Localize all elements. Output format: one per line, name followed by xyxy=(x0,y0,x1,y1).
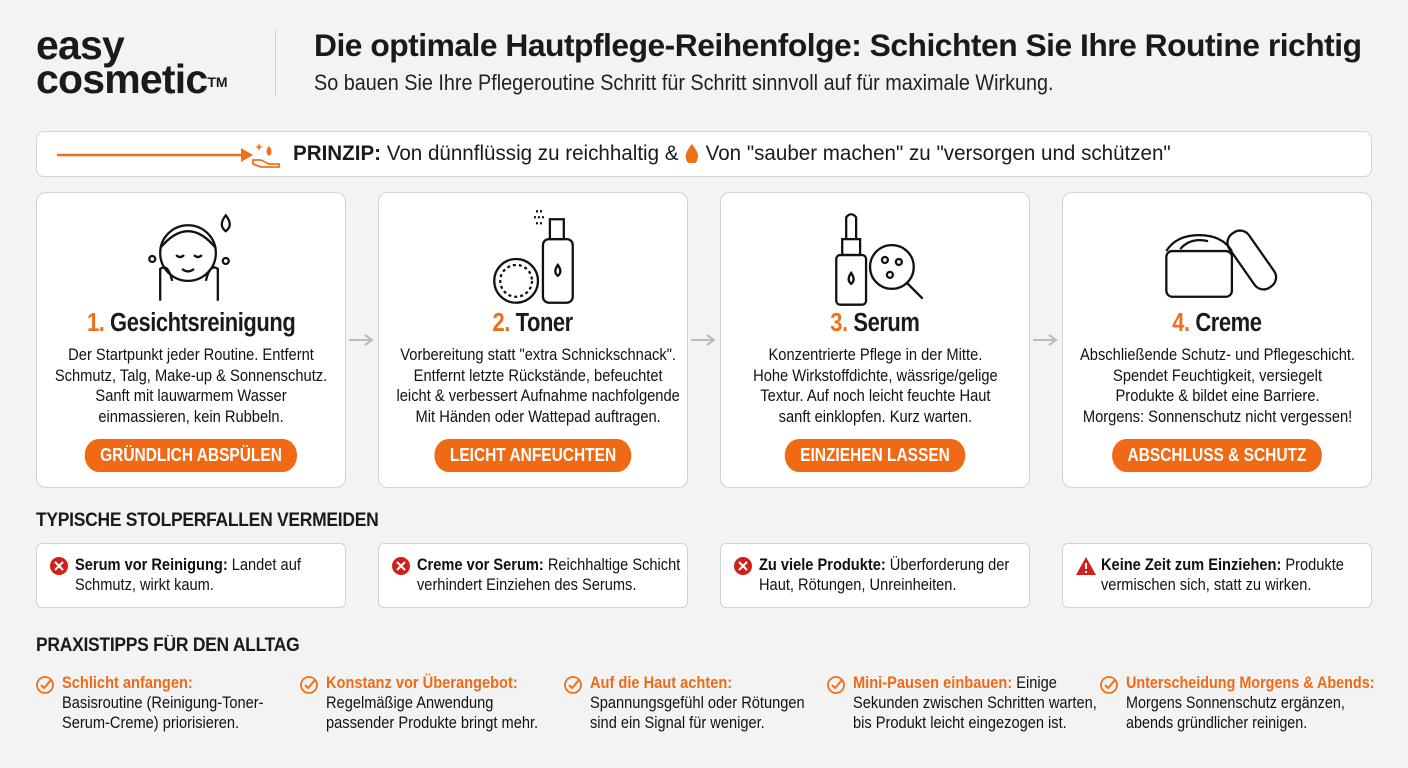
pitfall 1: Schmutz, wirkt kaum. xyxy=(75,575,214,594)
card 2 xyxy=(378,192,688,488)
button xyxy=(785,439,965,472)
text xyxy=(753,346,997,426)
tip 2 xyxy=(300,673,538,732)
arrow xyxy=(349,334,374,346)
pitfall 3: Haut, Rötungen, Unreinheiten. xyxy=(759,575,957,594)
text: Hohe Wirkstoffdichte, wässrige/gelige xyxy=(753,366,997,384)
heading: 3. Serum xyxy=(830,309,920,337)
button: LEICHT ANFEUCHTEN xyxy=(450,445,616,465)
text: Mit Händen oder Wattepad auftragen. xyxy=(416,408,661,426)
pitfall 4: vermischen sich, statt zu wirken. xyxy=(1101,575,1311,594)
text: sanft einklopfen. Kurz warten. xyxy=(778,408,972,426)
text xyxy=(1080,346,1355,426)
tip 3: sind ein Signal für weniger. xyxy=(590,713,765,732)
subtitle: So bauen Sie Ihre Pflegeroutine Schritt für Schritt sinnvoll auf für maximale Wirkung. xyxy=(314,70,1054,95)
button xyxy=(434,439,632,472)
logo xyxy=(36,22,228,102)
arrow xyxy=(1033,334,1058,346)
card 1 xyxy=(36,192,346,488)
arrow xyxy=(57,148,253,162)
tip 4: bis Produkt leicht eingezogen ist. xyxy=(853,713,1067,732)
icon: cream jar xyxy=(1165,229,1278,298)
arrow xyxy=(691,334,716,346)
tip 1: Schlicht anfangen: xyxy=(62,673,193,692)
pitfall 1: Serum vor Reinigung: Landet auf xyxy=(75,555,301,574)
text: Spendet Feuchtigkeit, versiegelt xyxy=(1113,366,1322,384)
text: Konzentrierte Pflege in der Mitte. xyxy=(768,346,982,364)
pitfall 1 xyxy=(36,543,346,608)
text: Sanft mit lauwarmem Wasser xyxy=(95,387,287,405)
tip 1 xyxy=(36,673,264,732)
tip 3: Spannungsgefühl oder Rötungen xyxy=(590,693,805,712)
button: EINZIEHEN LASSEN xyxy=(800,445,950,465)
pitfall 4: Keine Zeit zum Einziehen: Produkte xyxy=(1101,555,1344,574)
heading: tips: PRAXISTIPPS FÜR DEN ALLTAG xyxy=(36,635,299,656)
principle text: PRINZIP: Von dünnflüssig zu reichhaltig & Von "sauber machen" zu "versorgen und schützen" xyxy=(293,142,1171,165)
tip 4: Sekunden zwischen Schritten warten, xyxy=(853,693,1097,712)
card 3 xyxy=(720,192,1030,488)
tip 4: Mini-Pausen einbauen: Einige xyxy=(853,673,1057,692)
pitfall 2: verhindert Einziehen des Serums. xyxy=(417,575,636,594)
heading: 4. Creme xyxy=(1172,309,1262,337)
icon: serum xyxy=(835,213,924,306)
pitfall 2: Creme vor Serum: Reichhaltige Schicht xyxy=(417,555,680,574)
icon: toner xyxy=(493,210,574,304)
button: ABSCHLUSS & SCHUTZ xyxy=(1128,445,1306,465)
pitfall 3: Zu viele Produkte: Überforderung der xyxy=(759,555,1009,574)
card 4 xyxy=(1062,192,1372,488)
text: Der Startpunkt jeder Routine. Entfernt xyxy=(68,346,314,364)
button: GRÜNDLICH ABSPÜLEN xyxy=(100,445,282,465)
button xyxy=(1112,439,1322,472)
text: Schmutz, Talg, Make-up & Sonnenschutz. xyxy=(55,366,327,384)
tip 2: Regelmäßige Anwendung xyxy=(326,693,493,712)
text: Produkte & bildet eine Barriere. xyxy=(1116,387,1320,405)
text: Abschließende Schutz- und Pflegeschicht. xyxy=(1080,346,1355,364)
pitfall 2 xyxy=(378,543,688,608)
text: Textur. Auf noch leicht feuchte Haut xyxy=(760,387,990,405)
tip 3 xyxy=(564,673,805,732)
text: Entfernt letzte Rückstände, befeuchtet xyxy=(414,366,663,384)
pitfall 3 xyxy=(720,543,1030,608)
icon: face washing xyxy=(148,214,231,301)
heading: 1. Gesichtsreinigung xyxy=(87,309,295,337)
tip 2: Konstanz vor Überangebot: xyxy=(326,673,518,692)
tip 5: Morgens Sonnenschutz ergänzen, xyxy=(1126,693,1345,712)
tip 5: Unterscheidung Morgens & Abends: xyxy=(1126,673,1374,692)
tip 4 xyxy=(827,673,1097,732)
tip 3: Auf die Haut achten: xyxy=(590,673,732,692)
tip 1: Basisroutine (Reinigung-Toner- xyxy=(62,693,264,712)
tip 5: abends gründlicher reinigen. xyxy=(1126,713,1307,732)
tip 2: passender Produkte bringt mehr. xyxy=(326,713,538,732)
text: Morgens: Sonnenschutz nicht vergessen! xyxy=(1083,408,1352,426)
tip 1: Serum-Creme) priorisieren. xyxy=(62,713,239,732)
text xyxy=(55,346,327,426)
heading: pitfalls: TYPISCHE STOLPERFALLEN VERMEIDEN xyxy=(36,510,378,531)
title: Die optimale Hautpflege-Reihenfolge: Schichten Sie Ihre Routine richtig xyxy=(314,27,1362,63)
pitfall 4 xyxy=(1062,543,1372,608)
principle bar xyxy=(36,131,1372,177)
button xyxy=(85,439,297,472)
logo: cosmeticTM xyxy=(36,56,228,102)
tip 5 xyxy=(1100,673,1374,732)
text: einmassieren, kein Rubbeln. xyxy=(98,408,284,426)
icon: hand drop xyxy=(252,143,280,168)
text xyxy=(397,346,680,426)
text: leicht & verbessert Aufnahme nachfolgende xyxy=(397,387,680,405)
text: Vorbereitung statt "extra Schnickschnack". xyxy=(400,346,676,364)
heading: 2. Toner xyxy=(493,309,573,337)
logo: easy xyxy=(36,22,124,68)
